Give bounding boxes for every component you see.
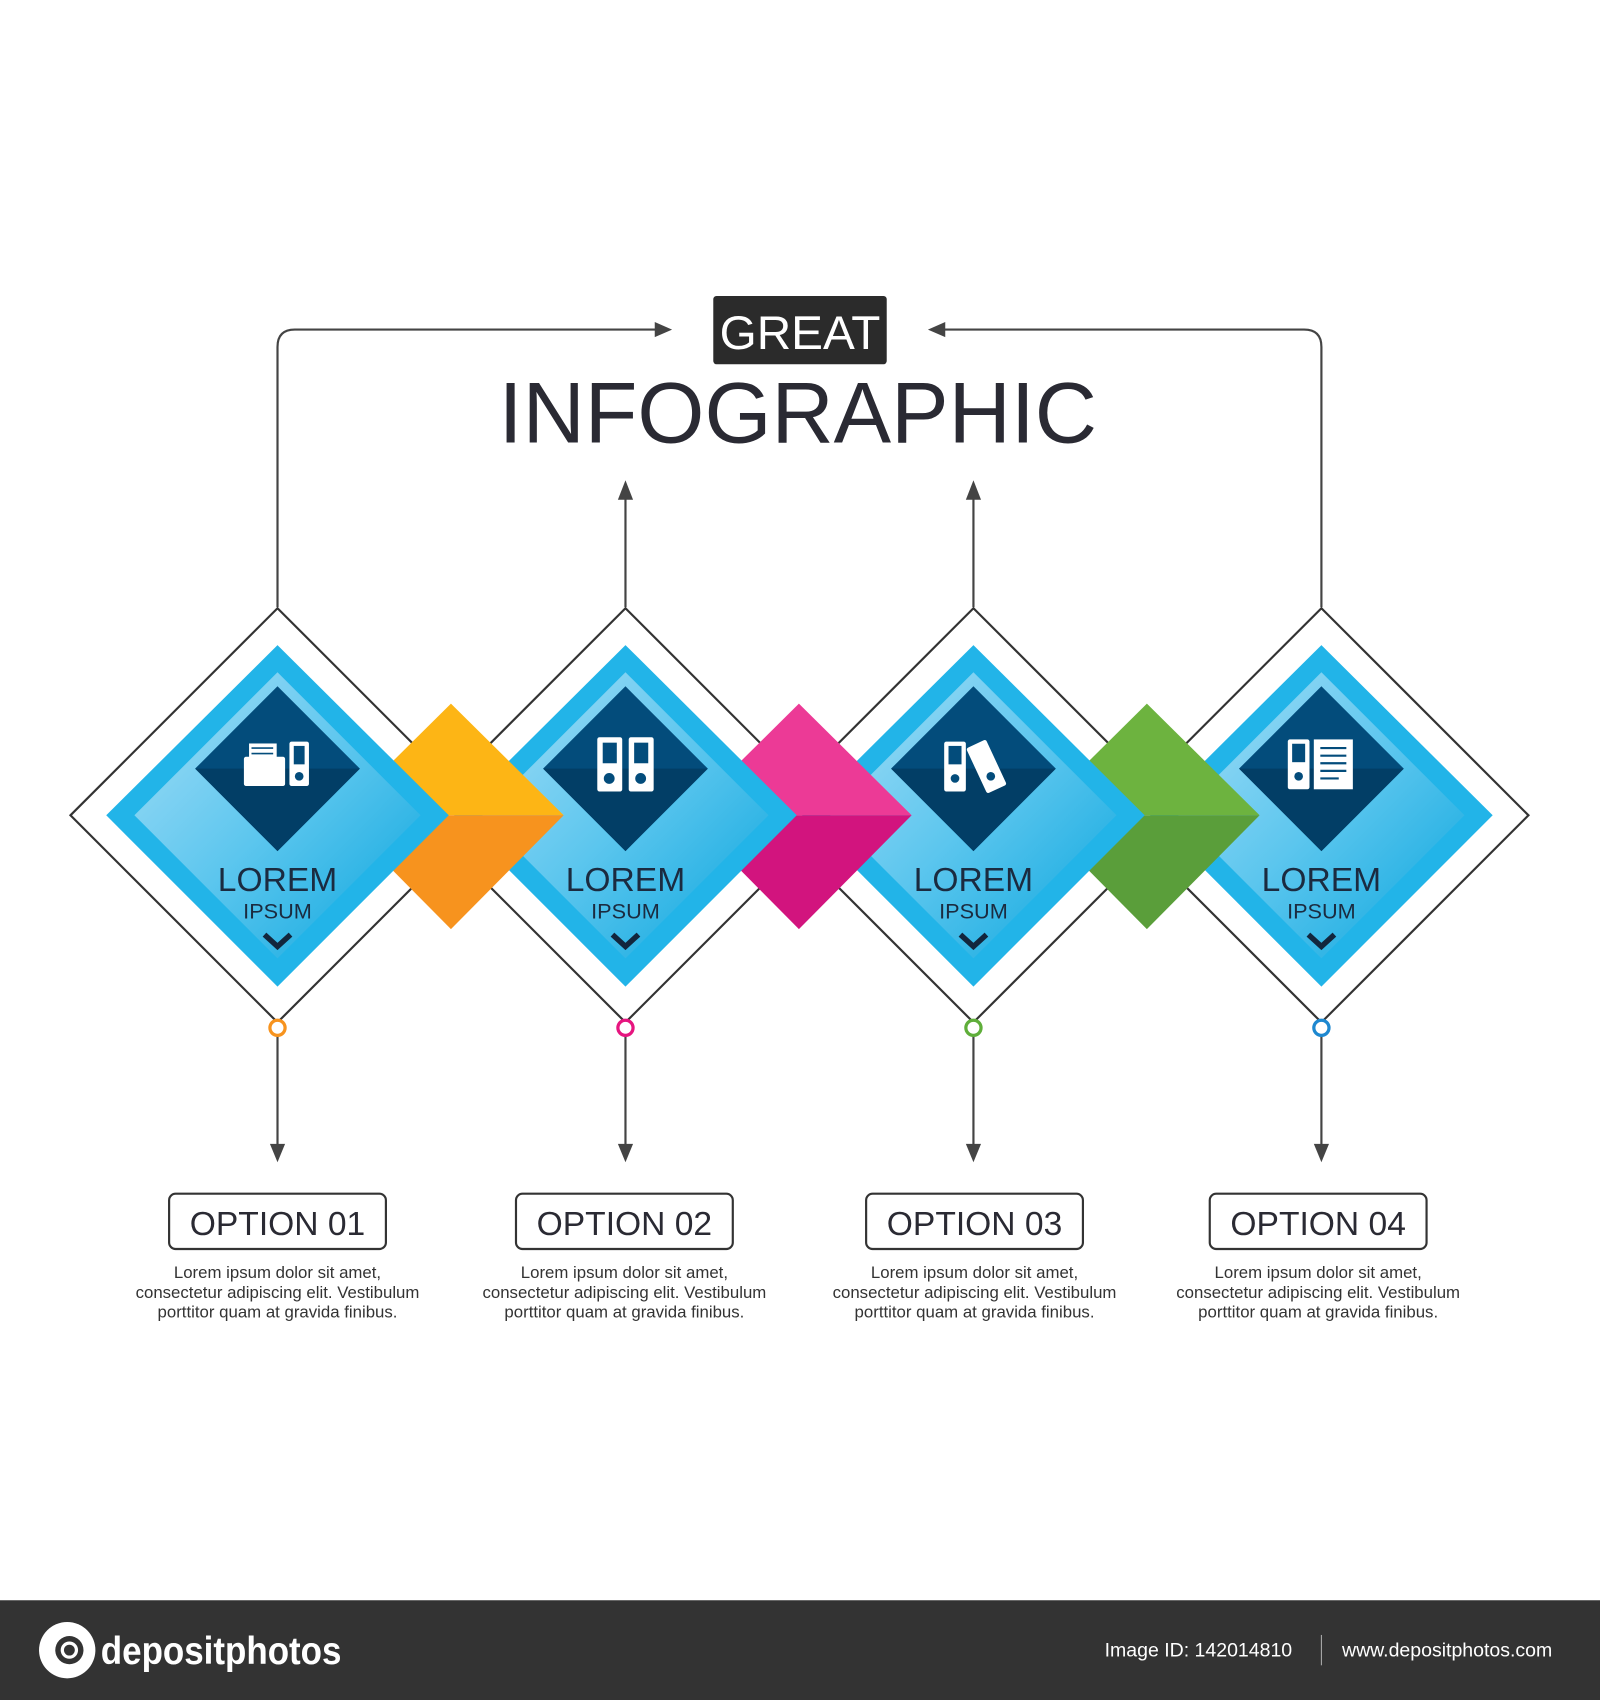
step labels: IPSUM bbox=[1287, 898, 1356, 923]
icon: camera logo bbox=[39, 1622, 95, 1678]
option 02: Lorem ipsum dolor sit amet, bbox=[521, 1263, 728, 1282]
markers bbox=[270, 1020, 1329, 1035]
icon: folder and binder bbox=[195, 686, 360, 851]
connector diamond: green bbox=[1034, 704, 1260, 929]
step labels: LOREM bbox=[566, 862, 685, 899]
step 3 blue diamond bbox=[802, 645, 1145, 987]
option 04 bbox=[1176, 1194, 1460, 1321]
icon: binder and document bbox=[1239, 686, 1404, 851]
step labels: IPSUM bbox=[243, 898, 312, 923]
title text: INFOGRAPHIC: INFOGRAPHIC bbox=[499, 364, 1097, 461]
connector diamond: orange bbox=[338, 704, 564, 929]
arrow: left connector to title bbox=[278, 322, 672, 607]
arrow: option 3 up bbox=[966, 480, 981, 607]
option 01 bbox=[136, 1194, 419, 1321]
icon: binders leaning bbox=[891, 686, 1056, 851]
title bbox=[499, 296, 1097, 461]
arrow: right connector to title bbox=[928, 322, 1321, 607]
footer credits: Image ID: 142014810 bbox=[1105, 1640, 1292, 1662]
option 02: porttitor quam at gravida finibus. bbox=[504, 1302, 744, 1321]
option 03: Lorem ipsum dolor sit amet, bbox=[871, 1263, 1078, 1282]
option 03: consectetur adipiscing elit. Vestibulum bbox=[833, 1283, 1116, 1302]
option 01: consectetur adipiscing elit. Vestibulum bbox=[136, 1283, 419, 1302]
step 4 blue diamond bbox=[1150, 645, 1493, 987]
option 03: OPTION 03 bbox=[887, 1206, 1062, 1243]
chevrons bbox=[264, 935, 1334, 946]
title badge: GREAT: GREAT bbox=[720, 307, 880, 360]
option 04: OPTION 04 bbox=[1230, 1206, 1406, 1243]
arrow: option 2 up bbox=[618, 480, 633, 607]
step labels: LOREM bbox=[218, 862, 337, 899]
footer credits: www.depositphotos.com bbox=[1341, 1640, 1552, 1662]
option 02: OPTION 02 bbox=[537, 1206, 712, 1243]
step labels: IPSUM bbox=[939, 898, 1008, 923]
option 02: consectetur adipiscing elit. Vestibulum bbox=[482, 1283, 766, 1302]
arrows down with circles bbox=[270, 1036, 1329, 1162]
footer bar bbox=[0, 1600, 1600, 1700]
icon: two binders bbox=[543, 686, 708, 851]
icon panels bbox=[195, 686, 1404, 851]
option 01: Lorem ipsum dolor sit amet, bbox=[174, 1263, 381, 1282]
step labels bbox=[218, 862, 1381, 923]
option 04: Lorem ipsum dolor sit amet, bbox=[1215, 1263, 1422, 1282]
step 1 blue diamond bbox=[106, 645, 449, 987]
option 01: porttitor quam at gravida finibus. bbox=[158, 1302, 397, 1321]
footer credits bbox=[1105, 1635, 1552, 1665]
step labels: LOREM bbox=[914, 862, 1033, 899]
footer logo text: depositphotos bbox=[101, 1630, 341, 1673]
step 2 blue diamond bbox=[454, 645, 797, 987]
option 01: OPTION 01 bbox=[190, 1206, 365, 1243]
option 03 bbox=[833, 1194, 1116, 1321]
step labels: IPSUM bbox=[591, 898, 660, 923]
step labels: LOREM bbox=[1262, 862, 1381, 899]
option 02 bbox=[482, 1194, 766, 1321]
option 04: porttitor quam at gravida finibus. bbox=[1198, 1302, 1438, 1321]
outline diamonds bbox=[70, 608, 1528, 1022]
option 04: consectetur adipiscing elit. Vestibulum bbox=[1176, 1283, 1460, 1302]
option 03: porttitor quam at gravida finibus. bbox=[855, 1302, 1094, 1321]
connector diamond: pink bbox=[686, 704, 912, 929]
